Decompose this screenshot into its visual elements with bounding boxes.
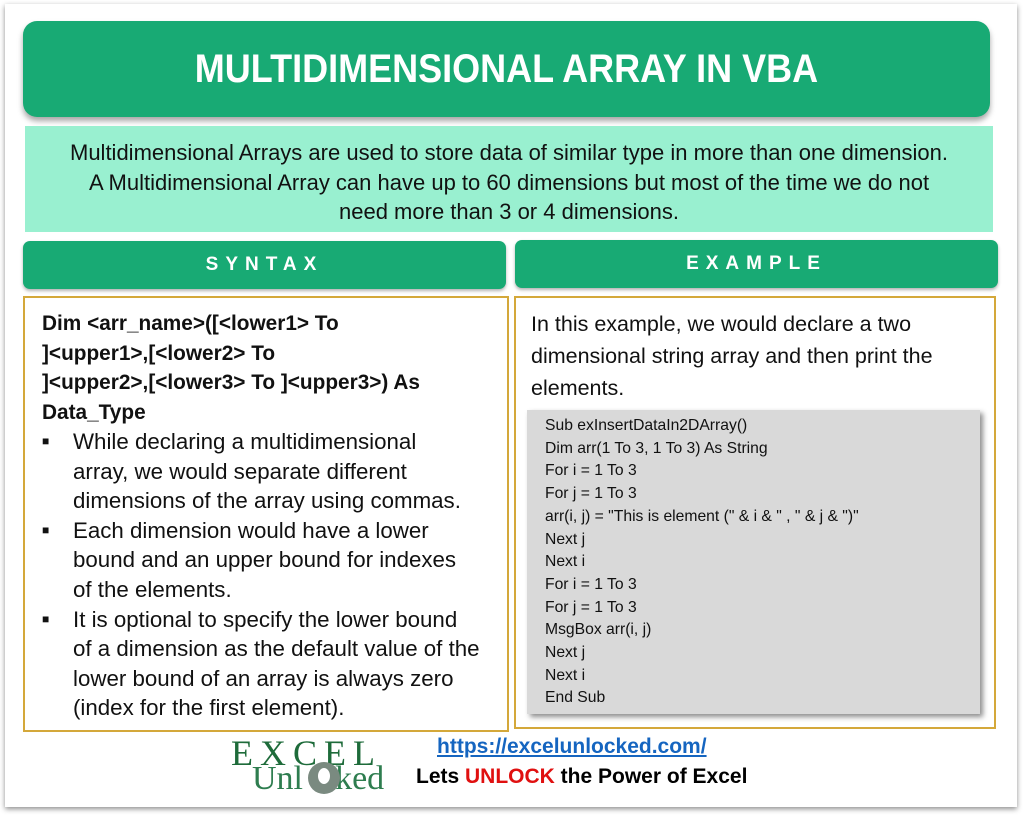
tagline: Lets UNLOCK the Power of Excel	[416, 765, 747, 788]
header: syntax: SYNTAX	[206, 254, 323, 275]
syntax statement	[42, 312, 420, 424]
example intro text	[531, 312, 933, 400]
description: Multidimensional Arrays are used to store data of similar type in more than one dimension.	[70, 140, 948, 165]
bullets text: ■	[42, 523, 49, 537]
description: need more than 3 or 4 dimensions.	[339, 199, 679, 224]
example intro text: dimensional string array and then print the	[531, 344, 933, 368]
syntax statement: ]<upper1>,[<lower2> To	[42, 342, 275, 365]
bullets text: array, we would separate different	[73, 459, 407, 484]
description	[25, 126, 993, 232]
logo: Excel Unlocked: Unlocked	[252, 760, 384, 797]
example intro text: elements.	[531, 376, 624, 400]
code block	[527, 410, 980, 714]
bullets text: ■	[42, 434, 49, 448]
syntax statement: Data_Type	[42, 401, 146, 424]
bullets text: dimensions of the array using commas.	[73, 488, 461, 513]
bullets text: Each dimension would have a lower	[73, 518, 429, 543]
header: syntax	[23, 241, 506, 289]
bullets text: While declaring a multidimensional	[73, 429, 416, 454]
panel: syntax	[23, 296, 509, 732]
bullets text: ■	[42, 612, 49, 626]
bullets text: lower bound of an array is always zero	[73, 666, 453, 691]
syntax statement: Dim <arr_name>([<lower1> To	[42, 312, 339, 335]
example intro text: In this example, we would declare a two	[531, 312, 911, 336]
title: MULTIDIMENSIONAL ARRAY IN VBA	[195, 47, 818, 91]
header: example	[515, 240, 998, 288]
bullets text: It is optional to specify the lower bound	[73, 607, 457, 632]
panel: example	[514, 296, 996, 729]
logo: Excel Unlocked: EXCEL	[231, 733, 382, 773]
logo: Excel Unlocked	[231, 733, 384, 797]
bullets text: of a dimension as the default value of the	[73, 636, 480, 661]
header: example: EXAMPLE	[686, 253, 827, 274]
description: A Multidimensional Array can have up to 60 dimensions but most of the time we do not	[89, 170, 929, 194]
icon: lock	[308, 762, 340, 794]
code block: Sub exInsertDataIn2DArray() Dim arr(1 To 3, 1 To 3) As String For i = 1 To 3 For j = 1 To 3 arr(i, j) = "This is element (" & i & " , " & j & ")" Next j Next i For i = 1 To 3 For j = 1 To 3 MsgBox arr(i, j) Next j Next i End Sub	[545, 417, 859, 706]
title	[23, 21, 990, 117]
bullets text	[42, 429, 480, 720]
website link: https://excelunlocked.com/	[437, 735, 707, 758]
syntax statement: ]<upper2>,[<lower3> To ]<upper3>) As	[42, 371, 420, 394]
bullets text: (index for the first element).	[73, 695, 344, 720]
bullets text: of the elements.	[73, 577, 232, 602]
bullets text: bound and an upper bound for indexes	[73, 547, 456, 572]
